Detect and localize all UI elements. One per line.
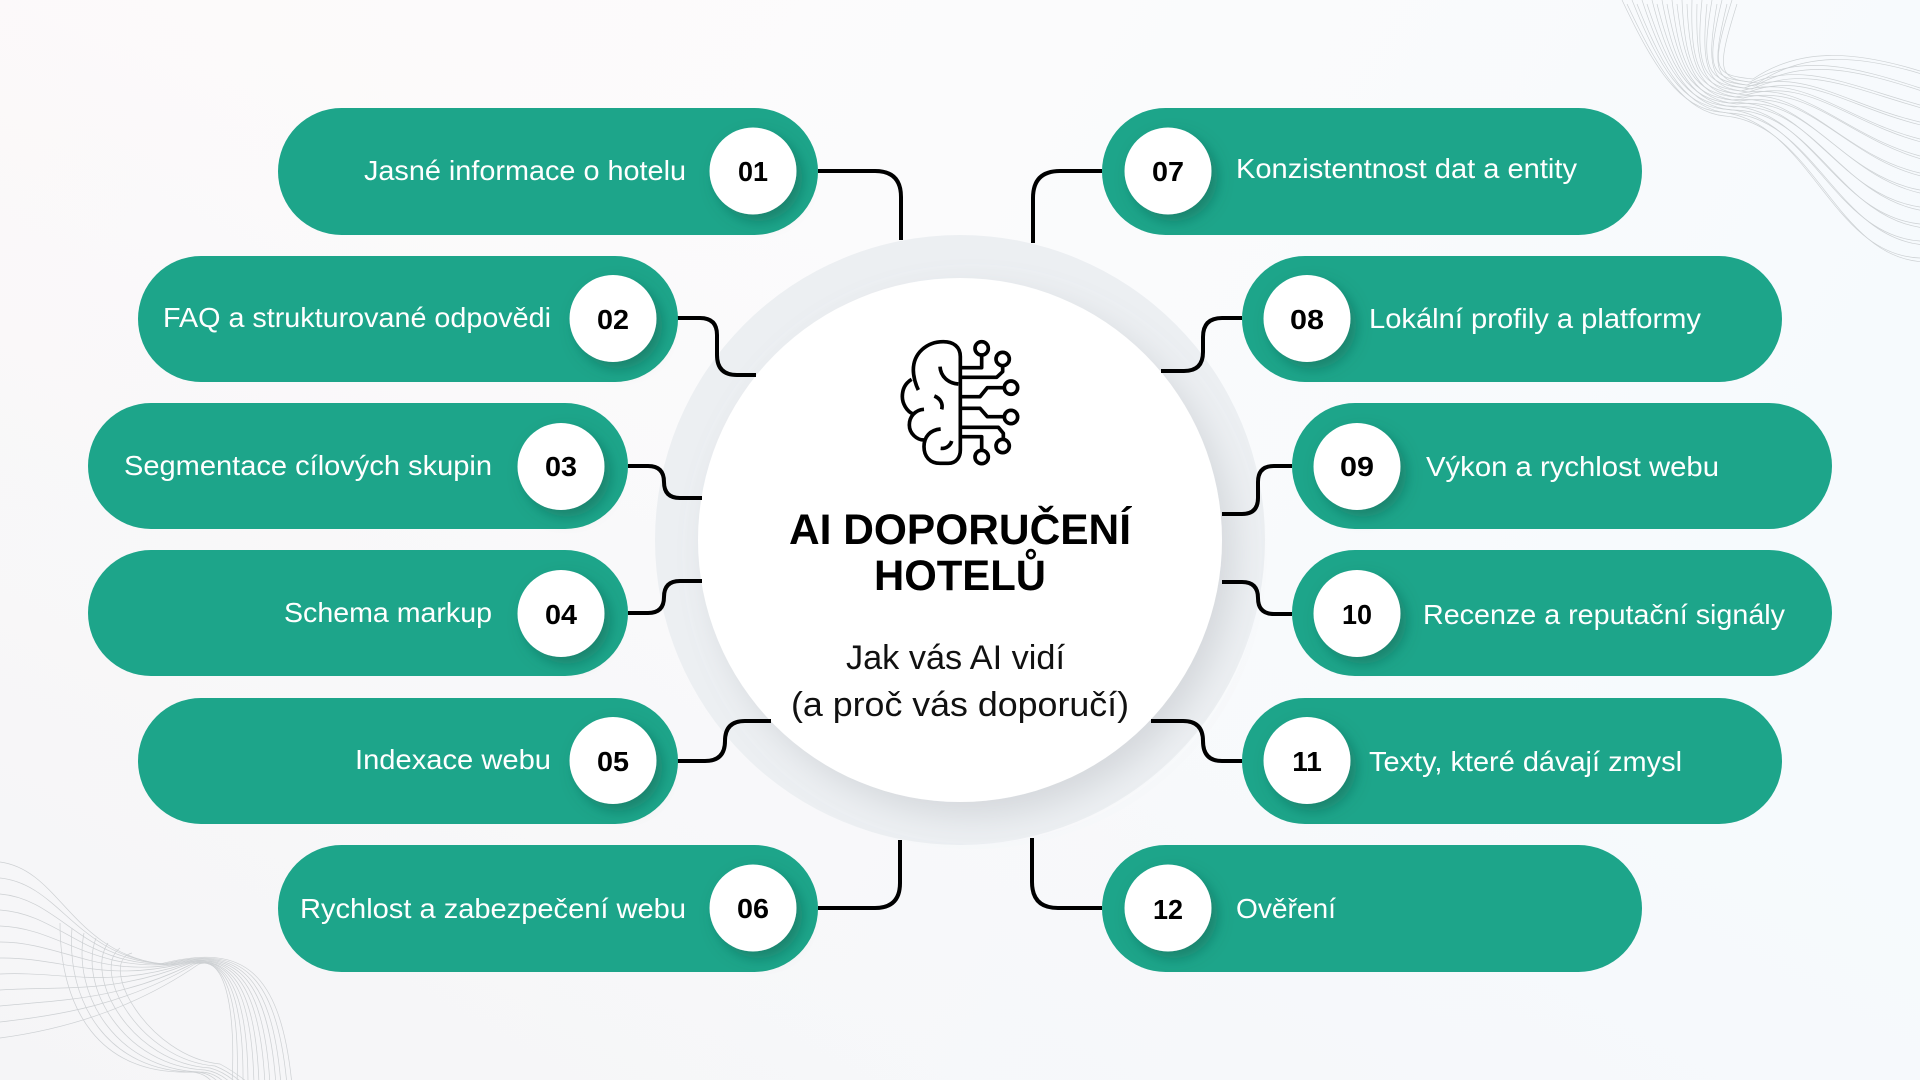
- item 01: 01: [738, 156, 768, 187]
- item 12: Ověření: [1236, 893, 1336, 924]
- inner white disc: [698, 278, 1222, 802]
- connector lines: [628, 171, 1292, 908]
- item 09: 09: [1340, 451, 1374, 482]
- item 10: 10: [1342, 599, 1372, 630]
- item 08: Lokální profily a platformy: [1369, 303, 1701, 334]
- item 04: 04: [545, 599, 577, 630]
- item 06: 06: [737, 893, 769, 924]
- item 04: [88, 550, 628, 676]
- item 10: [1292, 550, 1832, 676]
- item 09: [1292, 403, 1832, 529]
- title: HOTELŮ: [874, 548, 1046, 600]
- item 09: Výkon a rychlost webu: [1426, 451, 1719, 482]
- item 10: Recenze a reputační signály: [1423, 599, 1785, 630]
- decorative wave: top right: [1622, 0, 1920, 262]
- item 07: Konzistentnost dat a entity: [1236, 153, 1577, 184]
- item 11: 11: [1292, 746, 1322, 777]
- subtitle: (a proč vás doporučí): [791, 686, 1129, 724]
- item 06: Rychlost a zabezpečení webu: [300, 893, 686, 924]
- item 02: FAQ a strukturované odpovědi: [163, 302, 551, 333]
- title: AI DOPORUČENÍ: [789, 505, 1132, 554]
- item 12: [1102, 845, 1642, 972]
- item 02: 02: [597, 304, 629, 335]
- central circle with title: [655, 235, 1265, 845]
- item 03: 03: [545, 451, 577, 482]
- title: [789, 505, 1132, 600]
- item 05: 05: [597, 746, 629, 777]
- item 01: Jasné informace o hotelu: [364, 155, 686, 186]
- item 12: 12: [1153, 894, 1183, 925]
- item 07: 07: [1152, 156, 1184, 187]
- item 05: [138, 698, 678, 824]
- subtitle: [791, 639, 1129, 724]
- item 08: 08: [1290, 304, 1324, 335]
- item 11: [1242, 698, 1782, 824]
- item 07: [1102, 108, 1642, 235]
- item 03: [88, 403, 628, 529]
- item 08: [1242, 256, 1782, 382]
- icon: AI brain circuit: [902, 342, 1018, 464]
- item 06: [278, 845, 818, 972]
- item 04: Schema markup: [284, 597, 492, 628]
- item 02: [138, 256, 678, 382]
- item 11: Texty, které dávají zmysl: [1369, 746, 1682, 777]
- item 03: Segmentace cílových skupin: [124, 450, 492, 481]
- item 01: [278, 108, 818, 235]
- item 05: Indexace webu: [355, 744, 551, 775]
- subtitle: Jak vás AI vidí: [846, 639, 1066, 677]
- outer ring: [655, 235, 1265, 845]
- decorative wave: bottom left: [0, 862, 292, 1080]
